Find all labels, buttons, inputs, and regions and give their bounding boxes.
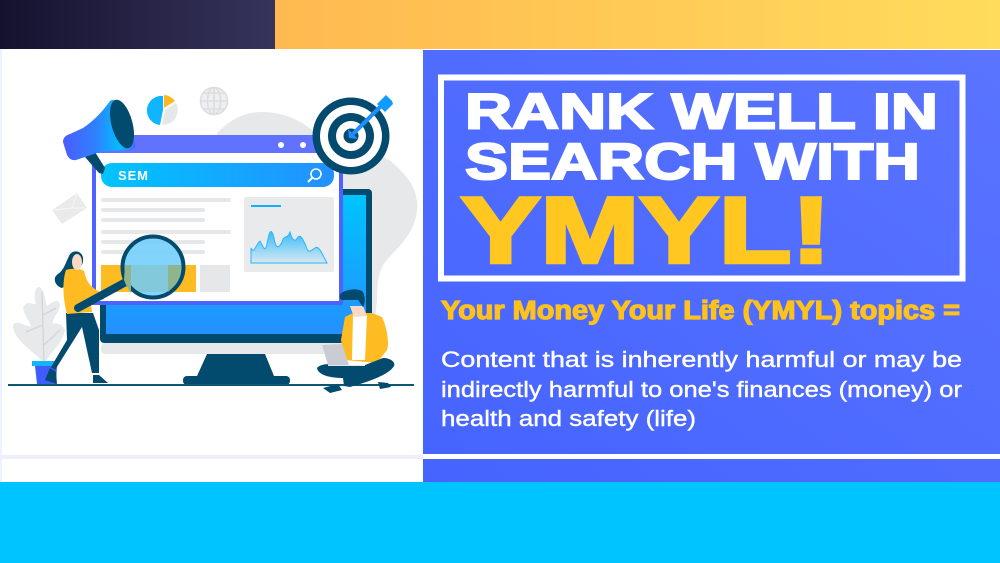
illustration: SEO scene: [8, 88, 417, 393]
icon: magnifying glass: [78, 236, 184, 308]
panel: blue content: [423, 50, 1000, 482]
title text: [461, 84, 938, 282]
chart card: [244, 197, 334, 272]
icon: plant pot: [32, 361, 57, 384]
top bar: dark segment: [0, 0, 275, 49]
title text: RANK WELL IN: [465, 84, 938, 140]
panel: illustration background: [0, 49, 423, 482]
browser window: [92, 135, 343, 305]
grey result block: [200, 265, 230, 292]
search bar: [101, 163, 334, 187]
icon: globe: [200, 88, 228, 114]
title text: YMYL!: [461, 178, 831, 282]
icon: plant: [13, 287, 65, 362]
definition text: indirectly harmful to one's finances (money) or: [441, 377, 963, 402]
bottom cyan band: [0, 482, 1000, 563]
top bar: orange segment: [275, 0, 1000, 49]
figure: woman with magnifier: [45, 251, 108, 384]
ground line: [8, 384, 414, 386]
icon: pie chart: [147, 95, 178, 125]
icon: target with arrow: [312, 95, 393, 174]
subheading: Your Money Your Life (YMYL) topics =: [441, 297, 960, 325]
title text: SEARCH WITH: [465, 133, 920, 190]
icon: envelope: [52, 193, 87, 224]
definition text: [441, 347, 963, 431]
definition text: Content that is inherently harmful or may be: [441, 347, 962, 372]
title frame: [441, 78, 962, 278]
definition text: health and safety (life): [441, 406, 696, 431]
yellow result block: [101, 265, 196, 292]
icon: megaphone: [63, 97, 139, 174]
white divider: [423, 454, 1000, 459]
search bar: SEM: [118, 168, 148, 183]
monitor: [100, 189, 373, 385]
figure: man with laptop: [317, 289, 394, 393]
text lines: [101, 198, 231, 254]
background blob: [217, 112, 417, 354]
